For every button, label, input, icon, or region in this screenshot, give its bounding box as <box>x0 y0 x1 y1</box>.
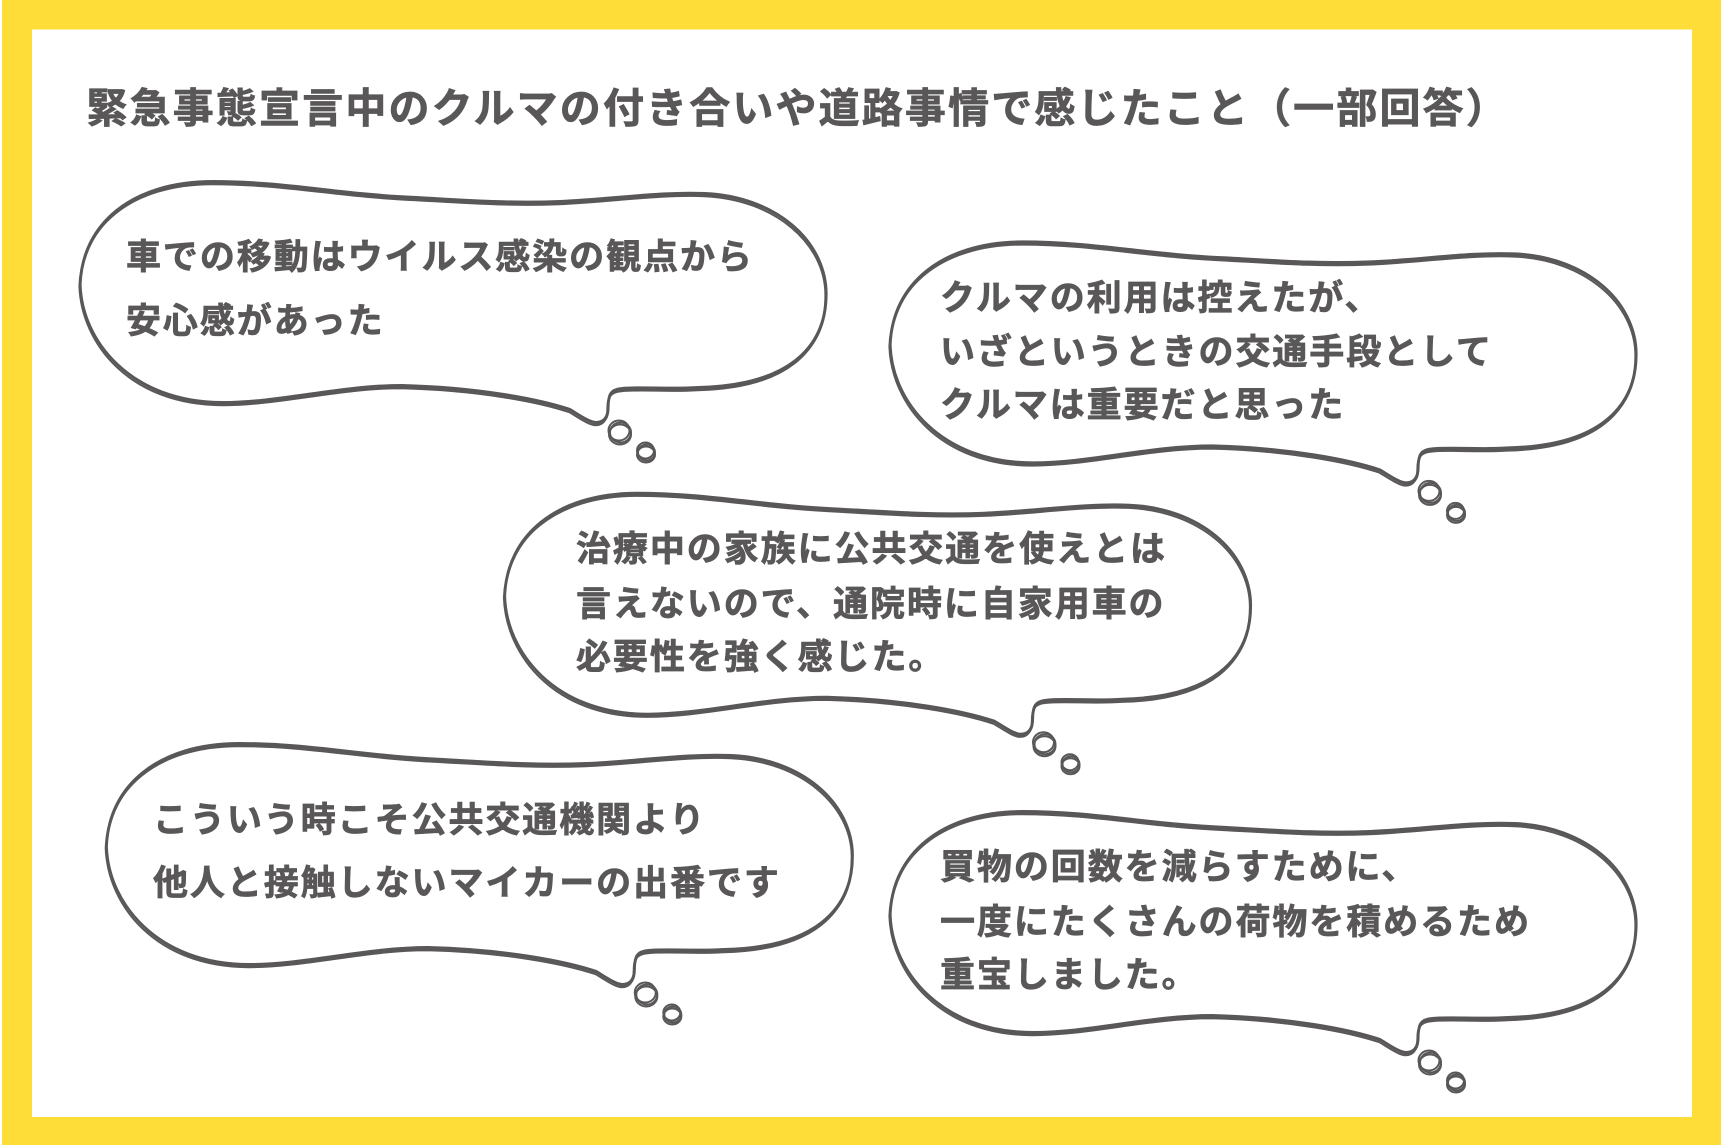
title: 緊急事態宣言中のクルマの付き合いや道路事情で感じたこと（一部回答） <box>86 86 1509 132</box>
speech bubble: safety from infection <box>79 181 827 462</box>
bubble 2 text: いざというときの交通手段として <box>940 332 1493 372</box>
bubble outline 2 <box>889 241 1637 523</box>
bubble 1 text <box>126 238 754 341</box>
speech bubble: family treatment <box>504 493 1251 774</box>
bubble 2 text: クルマの利用は控えたが、 <box>940 279 1381 318</box>
bubble 5 text: 重宝しました。 <box>940 956 1199 995</box>
bubble 1 text: 車での移動はウイルス感染の観点から <box>126 238 754 277</box>
bubble 5 text: 買物の回数を減らすために、 <box>940 848 1418 887</box>
bubble 2 text: クルマは重要だと思った <box>940 386 1345 425</box>
speech bubble: no contact <box>106 743 853 1024</box>
bubble 2 text <box>940 279 1493 425</box>
bubble outline 3 <box>504 493 1251 774</box>
bubble 4 text: 他人と接触しないマイカーの出番です <box>153 864 781 903</box>
speech bubble: important transport <box>889 241 1637 523</box>
bubble 4 text: こういう時こそ公共交通機関より <box>153 801 706 840</box>
bubble outline 5 <box>889 811 1637 1092</box>
bubble 3 text: 治療中の家族に公共交通を使えとは <box>576 530 1167 569</box>
bubble 5 text <box>940 848 1531 995</box>
bubble 1 text: 安心感があった <box>126 302 385 341</box>
bubble 5 text: 一度にたくさんの荷物を積めるため <box>940 903 1531 942</box>
bubble 3 text <box>576 530 1167 677</box>
speech bubble: shopping <box>889 811 1637 1092</box>
bubble 3 text: 必要性を強く感じた。 <box>576 638 945 677</box>
bubble 3 text: 言えないので、通院時に自家用車の <box>576 585 1165 624</box>
bubble outline 1 <box>79 181 827 462</box>
bubble outline 4 <box>106 743 853 1024</box>
bubble 4 text <box>153 801 781 903</box>
